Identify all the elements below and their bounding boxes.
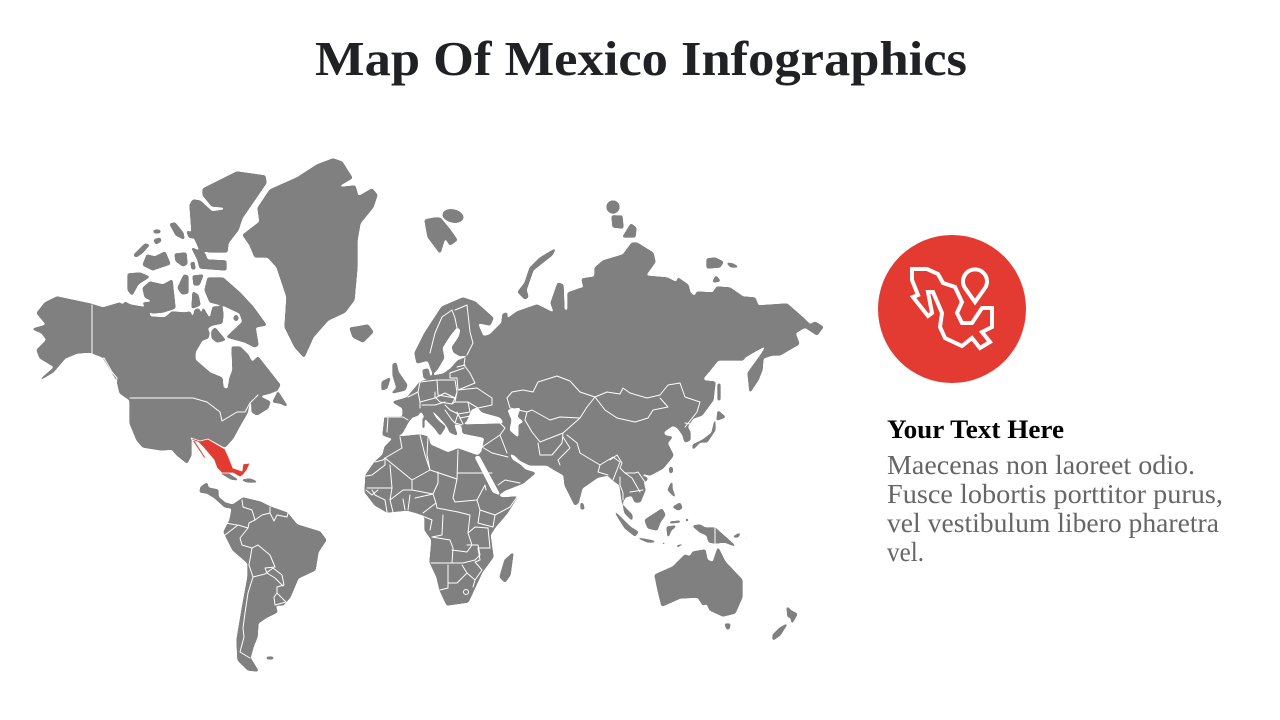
Eurasia — [383, 243, 823, 520]
Madagascar — [500, 553, 513, 582]
Newfoundland and Maritimes — [273, 392, 287, 406]
world map — [33, 159, 823, 671]
body text: vel vestibulum libero pharetra — [887, 508, 1219, 538]
Japan, Sakhalin and Pacific islands — [643, 384, 725, 510]
South America — [224, 498, 326, 671]
icon: location pin — [963, 269, 987, 302]
New Zealand — [773, 607, 797, 640]
Mexico highlighted — [191, 438, 250, 477]
body text: Maecenas non laoreet odio. — [887, 450, 1195, 480]
icon badge: Mexico map with pin — [878, 235, 1026, 383]
body text: Fusce lobortis porttitor purus, — [887, 479, 1223, 509]
Denmark, Corsica and Sardinia — [423, 369, 430, 428]
Falkland Islands — [266, 657, 274, 659]
text heading: Your Text Here — [887, 415, 1064, 444]
British Isles — [382, 363, 407, 393]
country borders — [92, 305, 715, 658]
inland seas — [433, 328, 523, 495]
Africa — [365, 435, 517, 605]
title: Map Of Mexico Infographics — [315, 31, 967, 86]
Tasmania — [725, 624, 730, 629]
landmasses — [33, 159, 823, 671]
Caribbean islands — [221, 473, 257, 482]
body text: vel. — [887, 537, 924, 567]
text block — [887, 415, 1223, 567]
Greenland — [243, 159, 377, 357]
Australia — [655, 548, 742, 616]
icon: Mexico outline — [912, 269, 992, 348]
body text — [887, 450, 1223, 567]
Central America — [200, 483, 238, 508]
Iceland — [350, 325, 373, 342]
Arctic Eurasian islands — [425, 201, 738, 322]
North America mainland — [33, 297, 280, 463]
red circle — [878, 235, 1026, 383]
Southeast Asia and Oceania islands — [581, 503, 748, 547]
Canadian Arctic islands — [128, 172, 266, 347]
